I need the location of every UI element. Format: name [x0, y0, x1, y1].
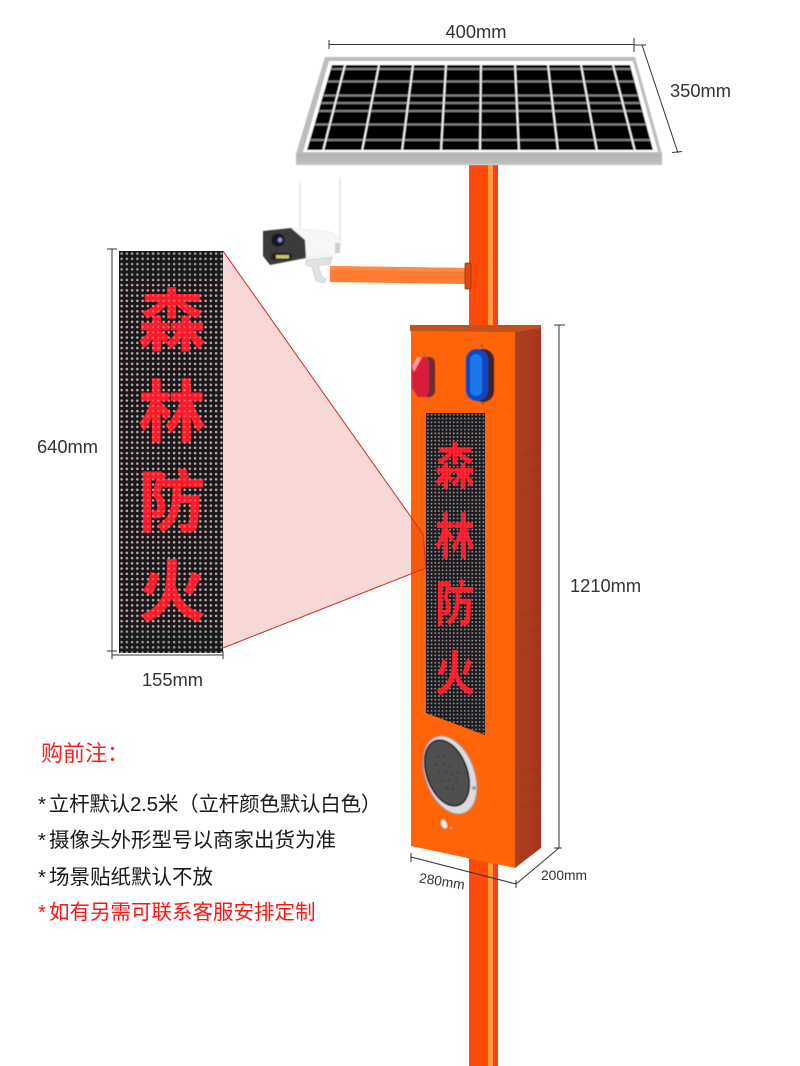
enlarged LED panel: 火	[138, 539, 206, 636]
dimension: 1210mm	[554, 325, 641, 848]
solar panel	[296, 57, 662, 165]
LED screen on box: 林	[435, 497, 475, 568]
dimension: 350mm: 350mm	[670, 80, 731, 101]
LED screen on box: 森	[435, 427, 475, 498]
enlarged LED panel	[119, 251, 223, 653]
indicator lamp	[439, 818, 452, 830]
enlarged LED panel: 防	[138, 449, 206, 546]
dimension: 200mm	[516, 848, 587, 884]
dimension: 155mm: 155mm	[142, 669, 203, 690]
camera	[263, 177, 341, 283]
dimension: 280mm	[411, 853, 516, 893]
dimension: 640mm: 640mm	[37, 436, 98, 457]
dimension: 155mm	[112, 651, 223, 690]
note 3: *场景贴纸默认不放	[38, 866, 213, 889]
speaker	[411, 727, 489, 823]
pole	[469, 165, 498, 1066]
dimension: 1210mm: 1210mm	[570, 575, 641, 596]
side grooves	[522, 451, 540, 808]
enlarged LED panel: 森	[138, 268, 206, 365]
LED screen on box: 火	[435, 634, 475, 705]
dimension: 200mm: 200mm	[541, 868, 587, 883]
red warning light	[412, 353, 435, 401]
dimension: 280mm: 280mm	[418, 870, 466, 893]
LED screen on box: 防	[435, 564, 475, 635]
blue warning light	[466, 344, 494, 405]
note 1: *立杆默认2.5米（立杆颜色默认白色）	[38, 793, 381, 816]
note 2: *摄像头外形型号以商家出货为准	[38, 829, 336, 852]
dimension: 350mm	[634, 45, 731, 153]
zoom projection	[223, 251, 426, 648]
box side face	[515, 327, 541, 868]
equipment box	[410, 325, 541, 868]
notes heading: 购前注：	[41, 741, 129, 766]
purchase notes	[38, 741, 381, 924]
note 4: *如有另需可联系客服安排定制	[38, 901, 315, 924]
dimension: 640mm	[37, 249, 117, 651]
box front face	[411, 328, 515, 868]
LED screen on box	[426, 413, 485, 735]
camera arm	[330, 263, 471, 289]
box top lid	[410, 325, 541, 332]
enlarged LED panel: 林	[138, 359, 206, 456]
dimension: 400mm	[329, 21, 634, 52]
dimension: 400mm: 400mm	[446, 21, 506, 42]
